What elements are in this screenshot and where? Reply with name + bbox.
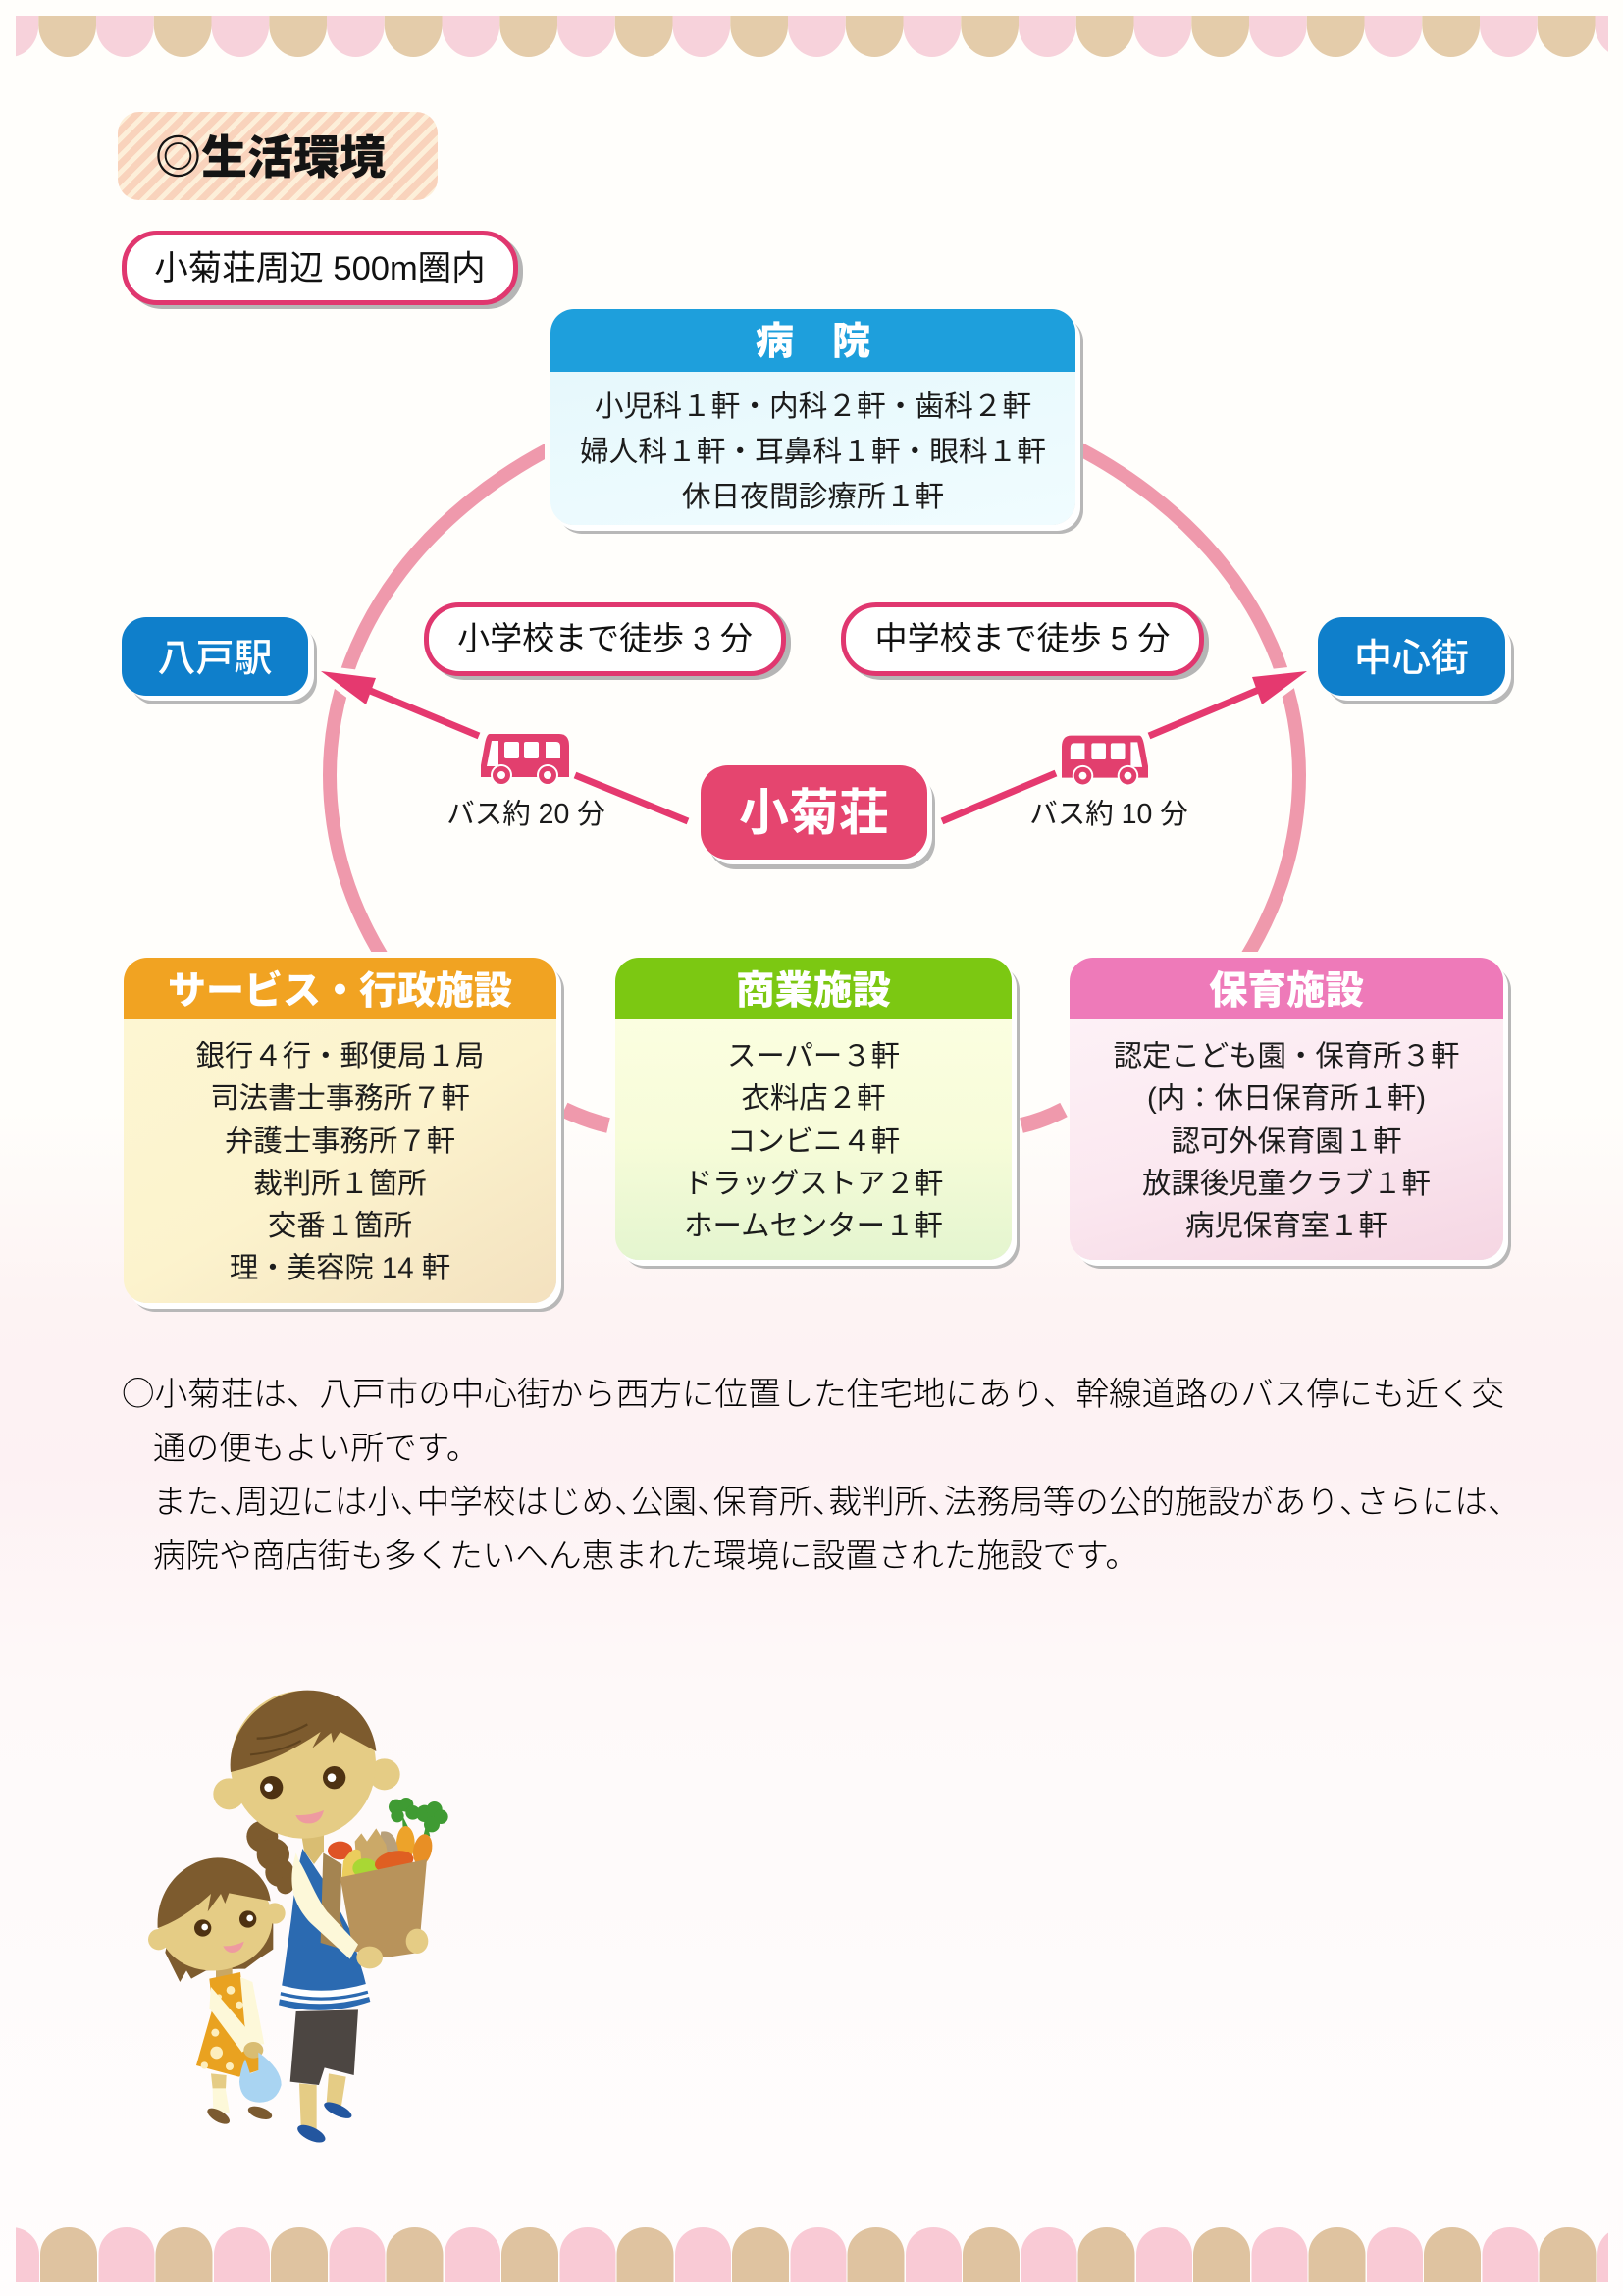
list: childcare: 認定こども園・保育所３軒 (1114, 1040, 1459, 1072)
section title (118, 112, 438, 200)
heading: childcare: 保育施設 (1209, 969, 1364, 1013)
heading: services (124, 958, 556, 1019)
list: hospitals: 休日夜間診療所１軒 (682, 481, 944, 513)
mother body (246, 1821, 370, 2146)
bus time label left: バス約 20 分 (446, 799, 605, 830)
heading: services: サービス・行政施設 (168, 970, 512, 1013)
heading: hospitals (550, 309, 1075, 372)
panel: services and government (124, 958, 556, 1303)
description paragraph: 病院や商店街も多くたいへん恵まれた環境に設置された施設です。 (153, 1539, 1138, 1575)
list: commercial: コンビニ４軒 (727, 1125, 900, 1158)
list: childcare: 放課後児童クラブ１軒 (1142, 1168, 1431, 1200)
bus time label right: バス約 10 分 (1029, 799, 1188, 830)
area note pill (122, 231, 518, 305)
panel: hospitals (550, 309, 1075, 525)
panel: commercial (615, 958, 1012, 1260)
list: services: 弁護士事務所７軒 (225, 1125, 455, 1158)
list: services (124, 1019, 556, 1303)
callout: junior high school (841, 602, 1204, 676)
list: childcare (1070, 1019, 1503, 1260)
icon: bus right (1062, 736, 1148, 785)
ring connecting facilities (323, 444, 1306, 1133)
list: hospitals: 婦人科１軒・耳鼻科１軒・眼科１軒 (580, 436, 1046, 468)
heading: commercial (615, 958, 1012, 1019)
station box: city centre: 中心街 (1354, 638, 1469, 680)
station box: city centre (1318, 617, 1505, 696)
station box: Hachinohe: 八戸駅 (157, 638, 273, 680)
callout: elementary school (424, 602, 786, 676)
child (148, 1857, 286, 2127)
list: commercial: スーパー３軒 (727, 1040, 900, 1072)
station box: Hachinohe (122, 617, 308, 696)
section title: ◎生活環境 (155, 131, 386, 183)
area note pill: 小菊荘周辺 500m圏内 (154, 250, 486, 287)
list: commercial: 衣料店２軒 (742, 1082, 885, 1115)
description paragraph: 通の便もよい所です。 (153, 1431, 479, 1467)
heading: childcare (1070, 958, 1503, 1019)
heading: hospitals: 病 院 (756, 321, 870, 363)
mother arm and head (213, 1681, 400, 1968)
description paragraph: ○小菊荘は、八戸市の中心街から西方に位置した住宅地にあり、幹線道路のバス停にも近く交 (122, 1367, 1504, 1415)
list: services: 裁判所１箇所 (253, 1168, 427, 1200)
callout: elementary school: 小学校まで徒歩 3 分 (457, 620, 753, 656)
centre box: Kogiku-so (701, 765, 927, 860)
description paragraph: また、周辺には小、中学校はじめ、公園、保育所、裁判所、法務局等の公的施設があり、さらには、 (153, 1485, 1521, 1521)
list: services: 司法書士事務所７軒 (210, 1082, 470, 1115)
callout: junior high school: 中学校まで徒歩 5 分 (875, 620, 1170, 656)
centre box: Kogiku-so: 小菊荘 (739, 785, 889, 841)
list: hospitals: 小児科１軒・内科２軒・歯科２軒 (595, 391, 1031, 423)
description paragraph (122, 1367, 1521, 1575)
list: services: 理・美容院 14 軒 (230, 1252, 450, 1284)
list: commercial: ドラッグストア２軒 (684, 1168, 943, 1200)
heading: commercial: 商業施設 (736, 969, 891, 1013)
icon: bus left (481, 734, 569, 784)
grocery bag (321, 1798, 448, 1957)
list: commercial (615, 1019, 1012, 1260)
illustration: mother and child shopping (148, 1690, 448, 2143)
list: childcare: (内：休日保育所１軒) (1147, 1082, 1426, 1115)
list: commercial: ホームセンター１軒 (684, 1210, 943, 1242)
list: hospitals (550, 372, 1075, 525)
list: services: 銀行４行・郵便局１局 (196, 1040, 484, 1072)
list: services: 交番１箇所 (268, 1210, 412, 1242)
list: childcare: 病児保育室１軒 (1185, 1210, 1387, 1242)
list: childcare: 認可外保育園１軒 (1171, 1125, 1402, 1158)
panel: childcare (1070, 958, 1503, 1260)
